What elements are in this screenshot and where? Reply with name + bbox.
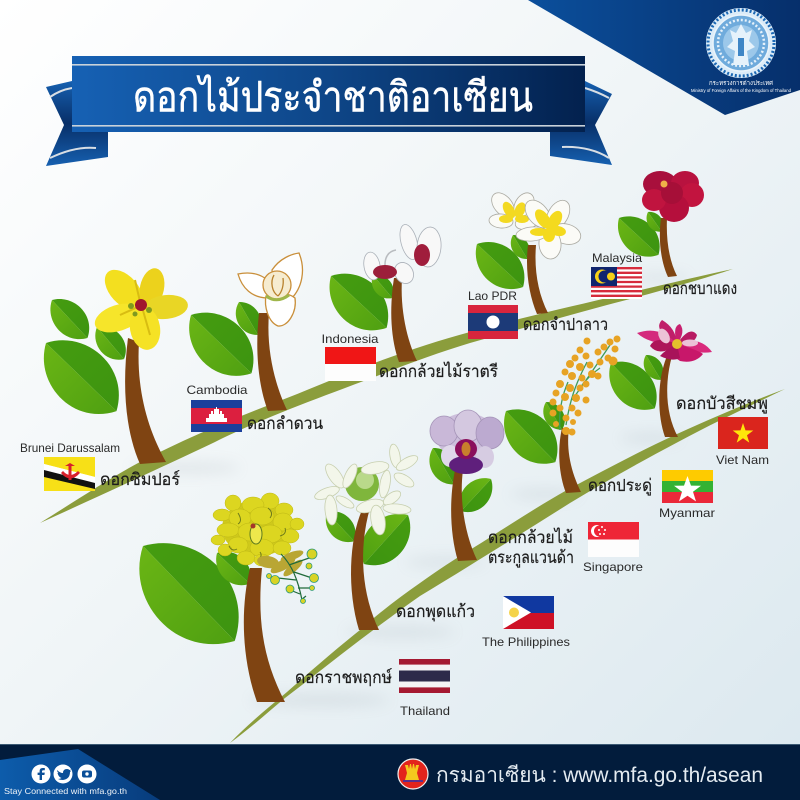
country name: Viet Nam: Viet Nam (716, 453, 769, 467)
flag: Singapore (588, 522, 639, 557)
footer bar (0, 744, 800, 800)
country name: Thailand: Thailand (400, 704, 450, 718)
tree: Myanmar (491, 336, 620, 493)
ground shadows (130, 274, 690, 707)
flower name: Singapore: ดอกกล้วยไม้ (488, 527, 573, 547)
flower: champa (487, 188, 583, 260)
leaves (422, 442, 501, 520)
tree: Malaysia (608, 171, 704, 277)
corner panel with ministry seal (528, 0, 800, 115)
flag: Thailand (399, 659, 450, 693)
flower: vanda orchid (430, 410, 504, 474)
trunk (660, 218, 677, 277)
leaves (26, 289, 137, 432)
flower name: Myanmar: ดอกประดู่ (588, 476, 652, 496)
flower name: Indonesia: ดอกกล้วยไม้ราตรี (379, 361, 498, 381)
flag: Malaysia (591, 267, 642, 299)
country name: Singapore: Singapore (583, 560, 643, 574)
flower name: Lao PDR: ดอกจำปาลาว (523, 315, 608, 334)
ministry name (691, 80, 792, 93)
trunk (391, 278, 417, 362)
tree: The Philippines (313, 443, 423, 630)
title: ดอกไม้ประจำชาติอาเซียน (133, 74, 533, 120)
flower: rumdul (238, 253, 302, 326)
footer blue corner (0, 749, 160, 800)
trunk (257, 313, 287, 411)
leaves (597, 350, 668, 421)
icon: ASEAN emblem (398, 759, 428, 789)
icon: ministry seal (706, 8, 776, 78)
tree: Brunei (26, 263, 189, 464)
tree: Thailand (114, 493, 318, 702)
country name: Malaysia: Malaysia (592, 251, 642, 265)
country name: The Philippines: The Philippines (482, 635, 570, 649)
country name: Myanmar: Myanmar (659, 506, 715, 520)
leaves (608, 206, 670, 267)
flag: The Philippines (503, 596, 554, 629)
country name: Brunei: Brunei Darussalam (20, 441, 120, 455)
trunk (527, 245, 548, 314)
trunk (351, 508, 379, 630)
flower name: Malaysia: ดอกชบาแดง (663, 279, 737, 298)
social icons (32, 764, 96, 784)
flag: Lao PDR (468, 305, 518, 339)
leaves (315, 259, 402, 345)
social caption: Stay Connected with mfa.go.th (4, 786, 127, 796)
title ribbon (46, 56, 612, 166)
ribbon tail left (46, 81, 108, 166)
flower: hibiscus (642, 171, 704, 222)
country name: Indonesia: Indonesia (322, 332, 379, 346)
ministry name: กระทรวงการต่างประเทศ (709, 80, 774, 87)
trunk (451, 470, 477, 561)
flower name: The Philippines: ดอกพุดแก้ว (396, 602, 475, 622)
flag: Brunei (44, 457, 95, 491)
trunk (559, 428, 581, 493)
lower branch (230, 389, 785, 743)
flower name: Viet Nam: ดอกบัวสีชมพู (676, 394, 768, 414)
ministry name: Ministry of Foreign Affairs of the Kingdom of Thailand (691, 88, 792, 93)
flag: Myanmar (662, 470, 713, 503)
leaves (491, 396, 571, 477)
flower name: Thailand: ดอกราชพฤกษ์ (295, 668, 392, 687)
ribbon band (72, 56, 585, 132)
flag: Cambodia (191, 400, 242, 432)
tree: Indonesia (315, 223, 443, 362)
website text: กรมอาเซียน : www.mfa.go.th/asean (436, 764, 763, 787)
flower: ratchaphruek (211, 493, 318, 604)
flag: Viet Nam (718, 417, 768, 449)
leaves (173, 296, 269, 391)
trunk (244, 568, 285, 702)
upper branch (40, 269, 733, 523)
tree: Lao PDR (464, 188, 583, 314)
flower name: Singapore (488, 527, 574, 568)
flower: pink lotus (637, 320, 712, 362)
trunk (659, 356, 678, 437)
tree: Cambodia (173, 253, 302, 411)
leaves (318, 502, 423, 577)
tree: Viet Nam (597, 320, 712, 437)
flower name: Brunei: ดอกซิมปอร์ (100, 470, 180, 489)
leaves (464, 230, 536, 301)
flower: padauk (550, 336, 620, 436)
country name: Cambodia: Cambodia (186, 383, 248, 397)
flower name: Cambodia: ดอกลำดวน (247, 414, 323, 433)
leaves (114, 518, 263, 668)
tree: Singapore (422, 410, 504, 561)
trunk (125, 338, 166, 464)
ribbon tail right (550, 81, 612, 165)
country name: Lao PDR: Lao PDR (468, 289, 517, 303)
hanging sprig (256, 548, 318, 604)
flower: simpor (91, 263, 189, 352)
flag: Indonesia (325, 347, 376, 381)
flower: sampaguita (313, 443, 420, 536)
flower: moon orchid (362, 223, 443, 287)
flower name: Singapore: ตระกูลแวนด้า (488, 548, 574, 568)
